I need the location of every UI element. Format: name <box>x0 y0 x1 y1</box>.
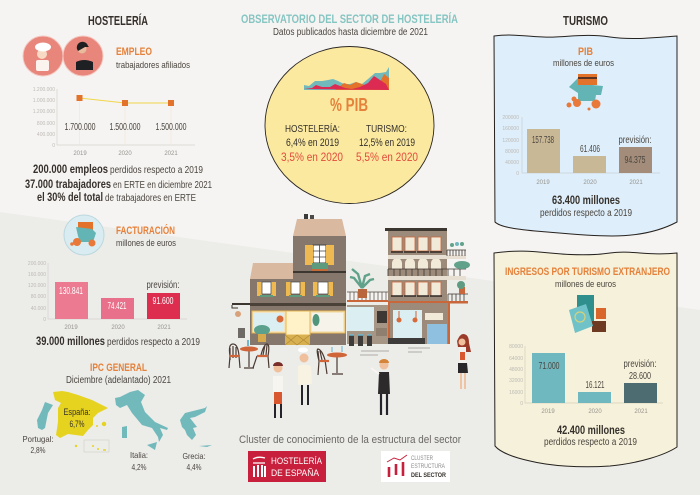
bar chart: facturación: 74.421 <box>108 301 127 312</box>
bar chart: facturación: 40.000 <box>31 306 46 312</box>
bar chart: facturación: 0 <box>43 317 46 323</box>
bar chart: pib <box>502 115 660 186</box>
panel: pib turismo <box>494 35 677 236</box>
empleo heading: EMPLEO <box>116 46 152 58</box>
panel: ingresos turismo extranjero <box>494 251 677 467</box>
line chart: empleo: 800.000 <box>37 121 55 127</box>
map: italia: Italia: <box>130 450 148 460</box>
bar chart: facturación: 80.000 <box>31 294 46 300</box>
logo: hostelería de españa: DE ESPAÑA <box>271 468 319 478</box>
bar chart: ingresos: 0 <box>520 401 523 407</box>
line chart: empleo: 1.000.000 <box>33 98 55 104</box>
ipc heading: Diciembre (adelantado) 2021 <box>66 375 171 386</box>
line chart: empleo: 1.200.000 <box>33 109 55 115</box>
panel: ingresos turismo extranjero: 42.400 millones <box>557 425 625 437</box>
bar chart: pib: 160000 <box>502 126 519 132</box>
person: woman <box>457 334 471 389</box>
map: grecia <box>180 406 212 472</box>
bar chart: facturación: 2021 <box>157 325 171 331</box>
panel: % PIB: 3,5% en 2020 <box>281 150 343 164</box>
bar chart: pib: 2020 <box>583 180 597 186</box>
bar chart: ingresos: 16000 <box>509 390 523 396</box>
logo: cluster estructura: CLUSTER <box>411 456 434 462</box>
bar chart: facturación: previsión: <box>146 280 180 291</box>
empleo heading <box>116 46 190 71</box>
bar chart: facturación: 120.000 <box>28 283 46 289</box>
panel: % PIB: 12,5% en 2019 <box>359 137 415 149</box>
bar chart: ingresos: 48000 <box>509 367 523 373</box>
bar chart: pib: 120000 <box>502 138 519 144</box>
bar chart: ingresos: 2021 <box>634 409 648 415</box>
bar chart: pib: 61.406 <box>580 144 600 155</box>
bar chart: pib: 40000 <box>505 160 519 166</box>
map: españa <box>53 391 109 452</box>
panel: % PIB: 6,4% en 2019 <box>286 137 339 149</box>
bar chart: ingresos: 64000 <box>509 356 523 362</box>
line chart: empleo: 0 <box>52 143 55 149</box>
person: waiter with vest <box>371 359 390 415</box>
map: españa: España: <box>64 407 90 417</box>
line chart: empleo: 400.000 <box>37 132 55 138</box>
icon: passports <box>569 295 606 333</box>
logo: cluster estructura <box>381 451 450 482</box>
bar chart: facturación: 200.000 <box>28 261 46 267</box>
empleo heading: trabajadores afiliados <box>116 60 190 71</box>
bar chart: pib: 2021 <box>629 180 643 186</box>
person: chef <box>298 348 312 405</box>
empleo summary text: en ERTE en diciembre 2021 <box>113 180 212 191</box>
empleo summary text: 200.000 empleos <box>33 164 108 176</box>
panel: % PIB: TURISMO: <box>366 123 407 135</box>
empleo summary text <box>25 164 212 204</box>
bar chart: facturación <box>28 261 187 331</box>
map: grecia: Grecia: <box>182 451 206 461</box>
panel: % PIB: 5,5% en 2020 <box>356 150 418 164</box>
chart icon: area <box>304 67 389 90</box>
panel: pib turismo: perdidos respecto a 2019 <box>540 208 632 219</box>
bar chart: facturación: 160.000 <box>28 272 46 278</box>
panel: pib turismo: PIB <box>578 46 593 58</box>
map: italia: 4,2% <box>132 462 147 472</box>
bar chart: ingresos <box>509 344 663 415</box>
bar chart: ingresos: 32000 <box>509 378 523 384</box>
map: portugal <box>22 402 54 455</box>
bar chart: ingresos: 2019 <box>541 409 555 415</box>
panel: pib turismo: millones de euros <box>553 58 614 69</box>
bar chart: ingresos: 80000 <box>509 344 523 350</box>
bar chart: pib: 2019 <box>536 180 550 186</box>
bar chart: facturación: 91.600 <box>152 296 174 307</box>
bar chart: pib: 80000 <box>505 149 519 155</box>
bar chart: ingresos: 2020 <box>588 409 602 415</box>
bar chart: ingresos: previsión: <box>624 359 656 370</box>
main title: Datos publicados hasta diciembre de 2021 <box>273 27 428 38</box>
bar chart: pib: previsión: <box>618 135 652 146</box>
icon: waiter <box>63 36 103 76</box>
map: portugal: 2,8% <box>30 445 46 455</box>
cluster caption: Cluster de conocimiento de la estructura del sector <box>239 434 461 446</box>
line chart: empleo: 1.500.000 <box>110 122 141 133</box>
empleo summary text: de trabajadores en ERTE <box>105 193 196 204</box>
logo: hostelería de españa <box>248 451 326 482</box>
bar chart: pib: 0 <box>516 171 519 177</box>
bar chart: facturación: 2019 <box>64 325 78 331</box>
icon: chef <box>23 36 63 76</box>
facturación heading <box>116 224 176 249</box>
bar chart: facturación: 130.841 <box>59 286 83 297</box>
bar chart: pib: 157.738 <box>532 135 554 146</box>
line chart: empleo: 2020 <box>118 151 132 157</box>
bar chart: ingresos: 16.121 <box>586 380 605 391</box>
facturación summary <box>36 336 200 348</box>
facturación summary: perdidos respecto a 2019 <box>107 337 200 348</box>
line chart: empleo: 1.200.000 <box>33 87 55 93</box>
line chart: empleo: 2019 <box>73 151 87 157</box>
panel: % PIB: HOSTELERÍA: <box>285 122 340 135</box>
bar chart: pib: 94.375 <box>624 155 646 166</box>
map: grecia: 4,4% <box>186 462 202 472</box>
line chart: empleo: 1.700.000 <box>64 122 96 133</box>
empleo summary text: 37.000 trabajadores <box>25 179 111 191</box>
line chart: empleo <box>33 87 195 157</box>
panel: % PIB <box>265 46 434 204</box>
panel: ingresos turismo extranjero: millones de euros <box>555 279 616 290</box>
facturación heading: FACTURACIÓN <box>116 224 175 237</box>
furniture <box>229 340 347 375</box>
logo: cluster estructura: DEL SECTOR <box>411 472 446 479</box>
map: españa: 6,7% <box>70 419 84 429</box>
illustration: street scene <box>229 214 471 418</box>
empleo summary text: el 30% del total <box>37 192 103 204</box>
main title <box>241 11 458 38</box>
bar chart: facturación: 2020 <box>111 325 125 331</box>
empleo summary text: perdidos respecto a 2019 <box>110 165 203 176</box>
icon: money <box>566 74 603 110</box>
bar chart: pib: 200000 <box>502 115 519 121</box>
line chart: empleo: 2021 <box>164 151 178 157</box>
main title: OBSERVATORIO DEL SECTOR DE HOSTELERÍA <box>241 11 458 26</box>
logo: hostelería de españa: HOSTELERÍA <box>271 456 322 466</box>
panel: ingresos turismo extranjero: perdidos respecto a 2019 <box>544 437 637 448</box>
facturación heading: millones de euros <box>116 238 176 249</box>
map: portugal: Portugal: <box>22 434 54 444</box>
bar chart: ingresos: 71.000 <box>538 361 560 372</box>
ipc heading <box>66 362 171 386</box>
map: italia <box>115 390 168 472</box>
panel: pib turismo: 63.400 millones <box>552 195 620 207</box>
line chart: empleo: 1.500.000 <box>156 122 187 133</box>
facturación summary: 39.000 millones <box>36 336 105 348</box>
panel: % PIB: % PIB <box>330 95 368 115</box>
bar chart: ingresos: 28.600 <box>629 371 651 382</box>
heading: hostelería: HOSTELERÍA <box>88 13 148 28</box>
logo: cluster estructura: ESTRUCTURA <box>411 464 445 470</box>
heading: turismo: TURISMO <box>563 13 608 28</box>
person: waiter with apron <box>273 362 283 418</box>
icon: money <box>64 215 104 255</box>
ipc heading: IPC GENERAL <box>90 362 147 374</box>
